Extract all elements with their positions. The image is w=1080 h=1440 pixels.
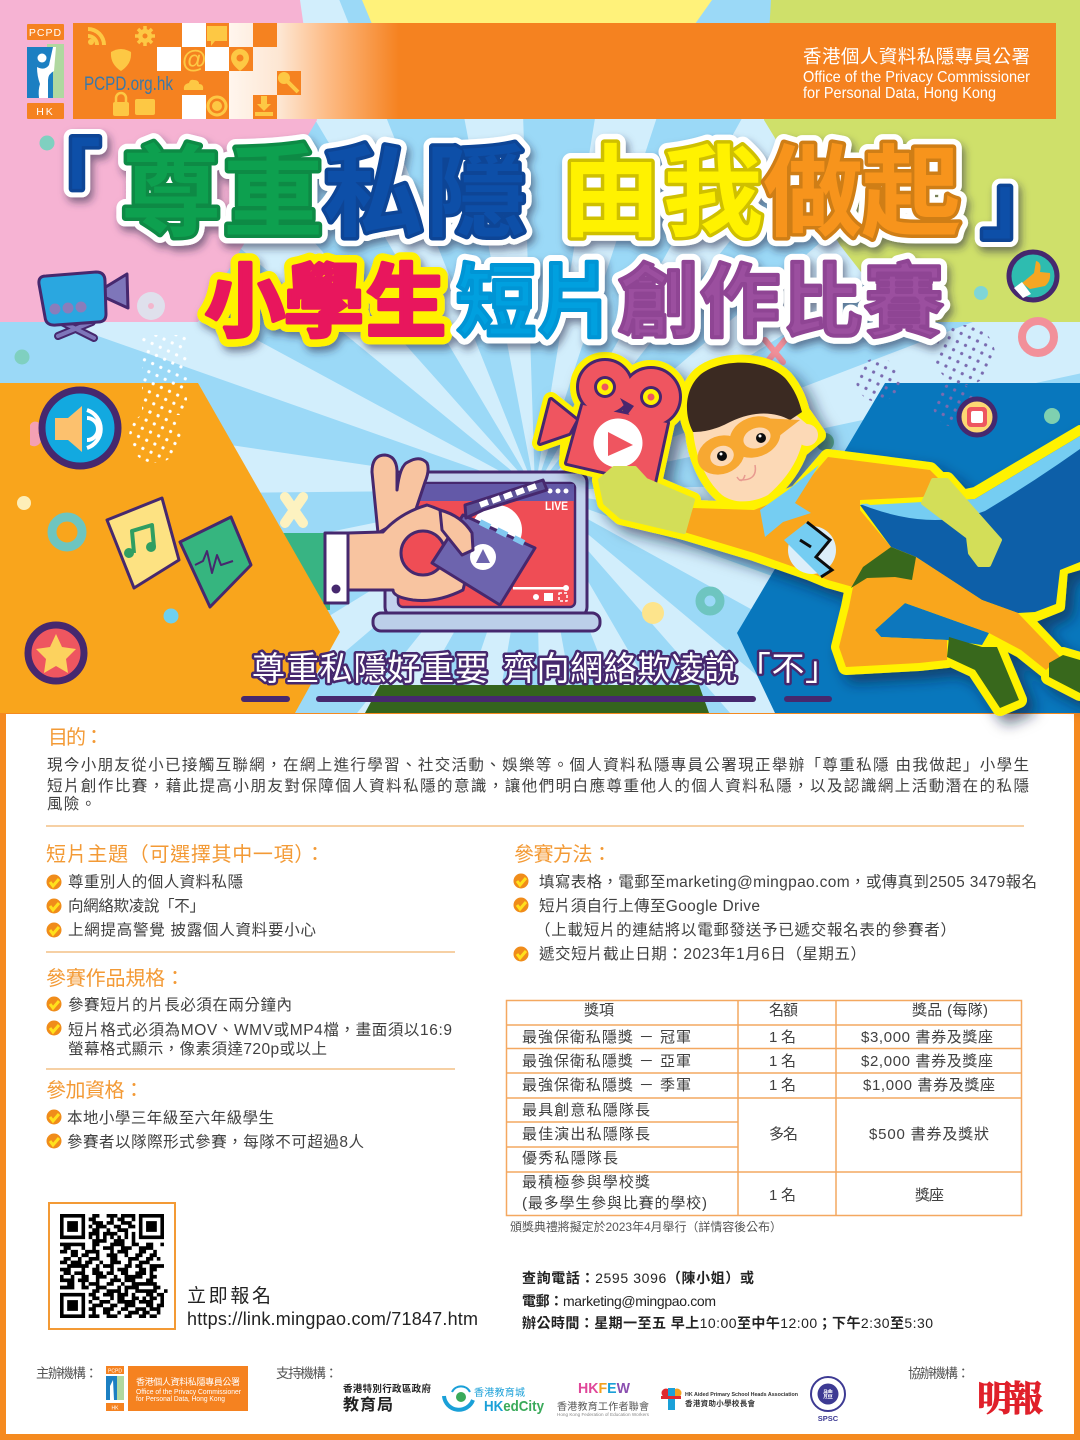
table rows: 1 名 <box>769 1187 796 1204</box>
logo: HKedCity: HKedCity <box>484 1398 545 1415</box>
PCPD logo <box>27 24 64 119</box>
table rows <box>522 1029 995 1212</box>
hand <box>372 455 428 533</box>
section: purpose: 目的： <box>48 726 104 749</box>
logo: HKedCity <box>444 1386 545 1415</box>
bullet list: how to enter <box>514 873 1037 963</box>
table rows: 最具創意私隱隊長 <box>522 1101 650 1119</box>
title outline: 尊重私隱 <box>121 138 526 250</box>
closing bracket: 」 <box>981 159 1061 248</box>
registration link <box>187 1285 478 1329</box>
hero background <box>0 0 1080 713</box>
title outline: 由我做起 <box>561 138 961 250</box>
footer: supporting organisations: 支持機構： <box>276 1366 338 1381</box>
footer: co-organiser: 協辦機構： <box>908 1366 970 1381</box>
contact details <box>522 1270 933 1331</box>
section: purpose <box>47 726 1029 813</box>
table rows: 優秀私隱隊長 <box>522 1149 618 1167</box>
section: purpose: 風險。 <box>47 795 96 813</box>
PCPD organisation name <box>803 46 1031 102</box>
bullet list: specifications: 參賽短片的片長必須在兩分鐘內 <box>68 996 292 1014</box>
icon: speaker badge <box>30 390 118 466</box>
table header: 獎品 (每隊) <box>912 1002 988 1019</box>
shirt cuff <box>325 533 348 603</box>
section: entry specifications: 參賽作品規格： <box>46 967 185 990</box>
bullet list: how to enter: 短片須自行上傳至Google Drive <box>539 897 760 915</box>
icon: small video camera <box>39 272 128 338</box>
registration link: 立即報名 <box>187 1285 271 1307</box>
mask <box>692 409 800 481</box>
gloves <box>600 468 693 532</box>
sub title: 短片創作比賽 <box>456 258 944 347</box>
section: how to enter <box>514 843 1037 963</box>
cape <box>860 436 1080 613</box>
logo: HKFEW: HKFEW <box>578 1380 631 1397</box>
bullet list: eligibility: 參賽者以隊際形式參賽，每隊不可超過8人 <box>67 1133 364 1151</box>
table rows: 最強保衛私隱獎 － 冠軍 <box>522 1029 691 1046</box>
bullet list: specifications: 短片格式必須為MOV、WMV或MP4檔，畫面須以16:9 <box>68 1021 452 1039</box>
section: eligibility: 參加資格： <box>46 1079 144 1102</box>
table rows: $3,000 書券及獎座 <box>861 1029 993 1046</box>
logo: HKFEW: 香港教育工作者聯會 <box>557 1400 649 1413</box>
icons: web symbols: @ <box>182 46 206 74</box>
logo: education bureau <box>343 1383 431 1414</box>
logo: SPSC: SPSC <box>818 1414 839 1423</box>
website address: PCPD.org.hk <box>84 74 173 95</box>
bullet list: how to enter: 遞交短片截止日期：2023年1月6日（星期五） <box>539 945 866 963</box>
table rows: 1 名 <box>769 1053 796 1070</box>
短片: 短片 <box>456 258 616 347</box>
section: purpose: 現今小朋友從小已接觸互聯網，在網上進行學習、社交活動、娛樂等。個人資料私隱專員公署現正舉辦「尊重私隱 由我做起」小學生 <box>47 755 1029 774</box>
opening bracket: 「 <box>21 134 101 223</box>
footer: organiser <box>36 1366 248 1412</box>
title outline: 」 <box>981 159 1061 248</box>
section: entry specifications <box>46 967 452 1058</box>
chest emblem <box>784 522 836 577</box>
header band <box>73 23 1056 119</box>
video camera <box>540 361 679 483</box>
slogan: 齊向網絡欺凌說「不」 <box>503 650 838 687</box>
head <box>796 424 818 446</box>
table rows: 最強保衛私隱獎 － 季軍 <box>522 1077 691 1094</box>
PCPD organisation name: for Personal Data, Hong Kong <box>803 85 996 102</box>
contact details: 查詢電話：2595 3096（陳小姐）或 <box>522 1270 754 1286</box>
PCPD logo: HK <box>36 106 55 118</box>
sub title <box>205 258 944 347</box>
icon: star badge <box>28 625 84 681</box>
thumb <box>440 510 473 555</box>
table rows: 最佳演出私隱隊長 <box>522 1126 650 1143</box>
table rows: 多名 <box>769 1125 798 1143</box>
shorts <box>851 547 916 588</box>
section: eligibility <box>46 1079 364 1151</box>
title blue words: 私隱 <box>323 138 526 250</box>
table rows: 最積極參與學校獎 <box>522 1173 650 1191</box>
logo: HKFEW: Hong Kong Federation of Education Workers <box>557 1412 650 1417</box>
table header: 名額 <box>769 1002 798 1019</box>
icon: thumbs up badge <box>1009 252 1057 300</box>
title yellow words: 由我 <box>561 138 763 250</box>
contact details: 辦公時間：星期一至五 早上10:00至中午12:00；下午2:30至5:30 <box>522 1315 933 1331</box>
sub title outline: 小學生 <box>205 258 446 347</box>
logo: HK Aided Primary School Heads Association: HK Aided Primary School Heads Association <box>685 1392 799 1398</box>
decorative dots and rings <box>14 136 1060 624</box>
slogan: 尊重私隱好重要 <box>252 650 488 687</box>
icons: web symbols <box>88 26 298 116</box>
footer: organiser: 主辦機構： <box>36 1366 98 1381</box>
bullet list: eligibility: 本地小學三年級至六年級學生 <box>67 1108 274 1127</box>
body <box>684 457 1060 670</box>
bullet list: specifications: 螢幕格式顯示，像素須達720p或以上 <box>68 1040 327 1058</box>
logo: HKFEW <box>557 1380 650 1417</box>
table rows: 最強保衛私隱獎 － 亞軍 <box>522 1053 691 1070</box>
title orange words: 做起 <box>763 138 961 250</box>
bullet list: how to enter: （上載短片的連結將以電郵發送予已遞交報名表的參賽者） <box>535 921 956 939</box>
title green words: 尊重 <box>121 138 323 250</box>
logo: PCPD small: HK <box>112 1406 119 1412</box>
icon: sound wave card <box>180 517 251 607</box>
section: how to enter: 參賽方法： <box>514 843 612 866</box>
section: video themes: 短片主題（可選擇其中一項）： <box>46 843 325 866</box>
collar <box>760 465 819 537</box>
table header: 獎項 <box>584 1002 614 1019</box>
table rows: $1,000 書券及獎座 <box>863 1077 995 1094</box>
section: video themes <box>46 843 325 939</box>
prize table <box>506 1000 1022 1216</box>
laptop <box>373 472 600 631</box>
bullet list: specifications <box>46 996 452 1058</box>
registration link: https://link.mingpao.com/71847.htm <box>187 1309 478 1329</box>
bullet list: themes: 上網提高警覺 披露個人資料要小心 <box>68 921 316 939</box>
table rows: 1 名 <box>769 1029 796 1046</box>
table rows: (最多學生參與比賽的學校) <box>522 1194 707 1212</box>
logo: SPSC <box>811 1377 845 1423</box>
QR code <box>49 1203 175 1329</box>
logo: PCPD small: 香港個人資料私隱專員公署 <box>136 1376 240 1387</box>
logo: education bureau: 教育局 <box>343 1395 393 1414</box>
logo: PCPD small: Office of the Privacy Commissioner <box>136 1389 242 1396</box>
icon: music card <box>107 498 179 588</box>
table rows: $2,000 書券及獎座 <box>861 1053 993 1070</box>
logo: HK Aided Primary School Heads Association: 香港資助小學校長會 <box>685 1398 756 1408</box>
logo: PCPD small: PCPD <box>108 1368 122 1374</box>
table header <box>584 1002 988 1019</box>
award ceremony note: 頒獎典禮將擬定於2023年4月舉行（詳情容後公布） <box>510 1219 782 1234</box>
footer: co-organiser <box>908 1366 1043 1422</box>
title outline: 「 <box>21 134 101 223</box>
logo: HKedCity: 香港教育城 <box>474 1386 525 1399</box>
創作比賽: 創作比賽 <box>618 258 944 347</box>
logo: Ming Pao: 明報 <box>977 1372 1043 1422</box>
bullet list: how to enter: 填寫表格，電郵至marketing@mingpao.com，或傳真到2505 3479報名 <box>539 873 1037 891</box>
小學生: 小學生 <box>205 258 446 347</box>
bullet list: themes <box>46 873 316 939</box>
logo: education bureau: 香港特別行政區政府 <box>343 1383 431 1395</box>
boots <box>947 637 1019 708</box>
logo: PCPD small: for Personal Data, Hong Kong <box>136 1396 225 1403</box>
PCPD logo: PCPD <box>29 27 62 39</box>
bullet list: themes: 尊重別人的個人資料私隱 <box>68 873 243 891</box>
illustration: hand holding clapperboard in front of laptop <box>325 455 600 631</box>
main title <box>21 134 1061 250</box>
logo: PCPD small <box>106 1366 248 1412</box>
laptop: LIVE <box>545 499 568 513</box>
superhero boy with camera <box>540 360 1080 708</box>
icon: record badge <box>959 399 995 435</box>
slogan <box>241 650 838 702</box>
bullet list: themes: 向網絡欺凌說「不」 <box>68 897 205 915</box>
white info panel with orange frame <box>0 713 1080 1440</box>
table rows: $500 書券及獎狀 <box>869 1126 989 1143</box>
clapperboard <box>432 515 535 605</box>
table rows: 獎座 <box>915 1187 944 1204</box>
logo: SPSC: 體 <box>823 1389 833 1401</box>
section: purpose: 短片創作比賽，藉此提高小朋友對保障個人資料私隱的意識，讓他們明白應尊重他人的個人資料私隱，以及認識網上活動潛在的私隱 <box>47 776 1029 795</box>
bullet list: eligibility <box>46 1108 364 1151</box>
title outline <box>21 134 1061 250</box>
yellow outline <box>540 360 1080 708</box>
logo: HK Aided Primary School Heads Association <box>661 1388 799 1410</box>
PCPD organisation name: Office of the Privacy Commissioner <box>803 69 1031 86</box>
PCPD organisation name: 香港個人資料私隱專員公署 <box>803 46 1030 67</box>
footer: supporting organisations <box>276 1366 845 1423</box>
table rows: 1 名 <box>769 1077 796 1094</box>
contact details: 電郵：marketing@mingpao.com <box>522 1293 716 1309</box>
